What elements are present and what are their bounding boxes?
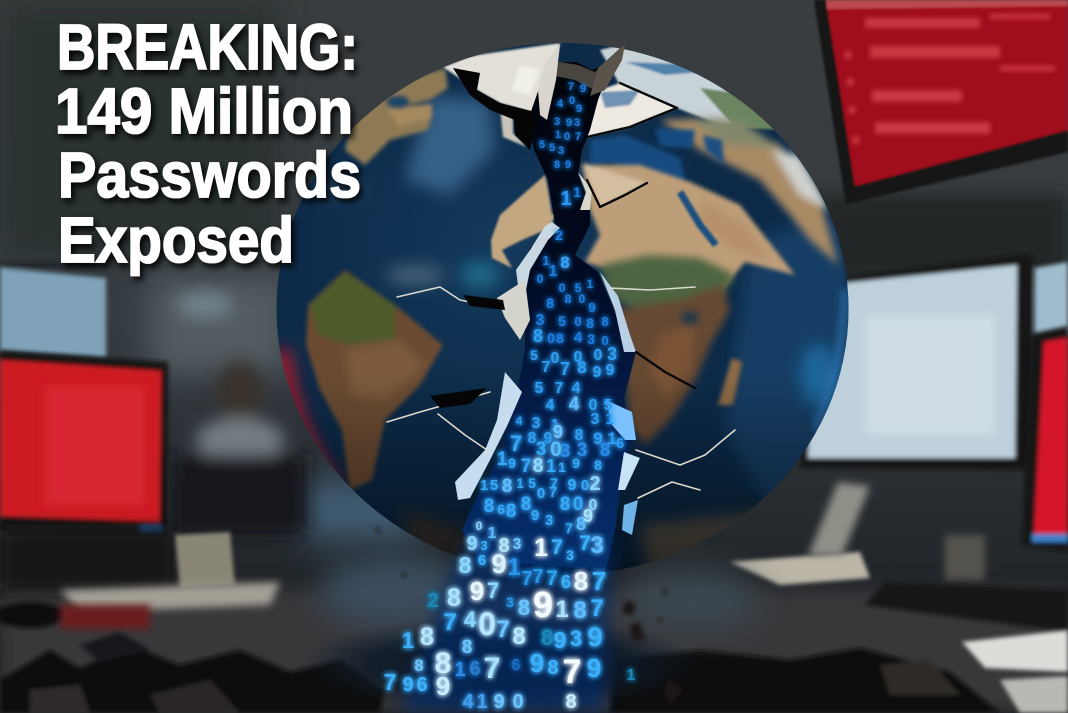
digits leaving the globe: 9 (402, 674, 414, 696)
digits inside upper crack: 1 (555, 129, 561, 141)
digits lower crack: 0 (573, 494, 583, 515)
digits inside upper crack: 3 (574, 117, 580, 129)
digits inside upper crack: 5 (539, 139, 545, 151)
digits lower crack: 0 (537, 485, 545, 502)
digits inside upper crack: 1 (587, 277, 594, 291)
digits lower crack: 9 (583, 506, 593, 526)
digits inside upper crack (533, 81, 609, 348)
digits leaving the globe (384, 532, 636, 713)
digits lower crack: 3 (536, 439, 546, 460)
digits lower crack: 7 (565, 520, 573, 536)
digits leaving the globe: 8 (541, 625, 553, 650)
digits mid crack: 0 (551, 350, 560, 367)
digits mid crack: 8 (577, 358, 587, 377)
digits leaving the globe: 0 (512, 691, 524, 713)
rubble on desk (0, 632, 1000, 713)
digits lower crack: 1 (546, 456, 556, 476)
digits inside upper crack: 0 (537, 272, 544, 286)
digits inside upper crack: 0 (564, 131, 570, 143)
digits leaving the globe: 0 (478, 606, 496, 642)
digits inside upper crack: 8 (546, 295, 554, 311)
southern africa (610, 285, 730, 445)
digits leaving the globe: 8 (435, 647, 451, 680)
digits leaving the globe: 1 (476, 691, 488, 713)
digits inside upper crack: 5 (558, 313, 566, 329)
globe surface cracks (387, 83, 735, 498)
digits mid crack: 3 (591, 411, 600, 428)
digits lower crack: 1 (558, 459, 566, 475)
digits inside upper crack: 1 (573, 184, 581, 200)
digits lower crack: 3 (577, 440, 587, 461)
central africa green (600, 255, 735, 320)
digits inside upper crack: 0 (579, 292, 586, 306)
digits leaving the globe: 7 (532, 566, 544, 588)
digits inside upper crack: 1 (542, 253, 550, 268)
dark floor under the stream (300, 615, 700, 713)
digits lower crack: 8 (594, 457, 602, 473)
digits leaving the globe: 8 (498, 535, 510, 557)
digits leaving the globe: 9 (554, 627, 566, 653)
digits leaving the globe: 1 (402, 628, 414, 653)
digits mid crack: 5 (535, 380, 544, 397)
digits mid crack: 9 (553, 422, 563, 442)
digits lower crack: 3 (545, 512, 553, 529)
digits leaving the globe: 3 (566, 547, 574, 563)
digits mid crack: 8 (528, 430, 537, 447)
digits mid crack: 4 (569, 394, 580, 415)
digits mid crack: 1 (551, 417, 560, 434)
digits inside upper crack: 8 (560, 253, 570, 272)
digits leaving the globe: 1 (534, 534, 548, 562)
digits lower crack: 8 (560, 494, 570, 515)
digits leaving the globe: 1 (627, 667, 636, 684)
digits leaving the globe: 8 (518, 595, 530, 620)
monitor: right white screen (800, 254, 1068, 470)
digits leaving the globe: 7 (546, 567, 558, 590)
digits leaving the globe: 3 (590, 532, 604, 559)
debris fragments (376, 528, 684, 704)
digits lower crack: 8 (600, 440, 610, 461)
ocean base (270, 40, 860, 580)
digits lower crack: 7 (549, 484, 557, 501)
bottom shading (295, 394, 832, 575)
digits mid crack: 0 (594, 347, 603, 364)
falling digits stream (384, 81, 636, 713)
digits leaving the globe: 6 (469, 658, 481, 680)
digits lower crack: 9 (572, 455, 580, 471)
digits inside upper crack: 9 (588, 300, 596, 315)
digits leaving the globe: 6 (478, 552, 486, 569)
digits inside upper crack: 0 (574, 314, 582, 329)
digits leaving the globe: 1 (555, 596, 569, 623)
digits leaving the globe: 7 (563, 653, 581, 691)
digits leaving the globe: 9 (587, 653, 601, 683)
west africa bulge (491, 175, 556, 268)
north polar cap (443, 43, 790, 147)
digits leaving the globe: 6 (512, 657, 521, 674)
digits mid crack: 4 (546, 397, 555, 414)
digits lower crack: 9 (568, 477, 577, 494)
red sea (680, 192, 716, 245)
digits lower crack: 1 (516, 475, 524, 491)
digits mid crack: 1 (606, 411, 615, 428)
digits leaving the globe: 9 (493, 691, 505, 713)
digits mid crack: 3 (532, 415, 541, 432)
digits lower crack: 1 (497, 449, 508, 470)
southern land (402, 506, 754, 564)
headline: Passwords (58, 139, 361, 211)
digits mid crack: 4 (516, 414, 523, 428)
digits leaving the globe: 9 (587, 622, 603, 652)
right ocean (725, 210, 850, 510)
digits lower crack: 7 (550, 475, 558, 491)
digits leaving the globe: 1 (507, 554, 521, 581)
digits inside upper crack: 0 (569, 95, 575, 107)
digits leaving the globe: 6 (416, 674, 428, 696)
digits mid crack (516, 344, 624, 452)
digits leaving the globe: 7 (496, 616, 510, 643)
digits lower crack: 1 (488, 525, 497, 542)
digits leaving the globe: 9 (533, 584, 553, 625)
digits leaving the globe: 4 (462, 691, 474, 713)
digits inside upper crack: 1 (549, 263, 558, 280)
digits mid crack: 5 (530, 347, 538, 363)
digits lower crack: 8 (484, 496, 494, 517)
north africa and arabia (582, 163, 795, 290)
monitor: left red screen (0, 350, 168, 536)
torn crust flaps (455, 172, 640, 535)
digits leaving the globe: 8 (420, 623, 434, 651)
digits mid crack: 9 (593, 364, 602, 381)
headline: 149 Million (55, 75, 353, 147)
clouds over pacific (314, 95, 500, 289)
digits mid crack: 7 (542, 359, 551, 376)
digits inside upper crack: 1 (560, 188, 572, 210)
north america (345, 68, 448, 165)
south america (306, 270, 443, 490)
digits mid crack: 7 (560, 359, 570, 379)
digits leaving the globe: 9 (466, 533, 478, 555)
digits lower crack: 0 (581, 477, 589, 494)
digits lower crack: 7 (510, 431, 522, 456)
digits leaving the globe: 3 (506, 594, 514, 610)
digits leaving the globe: 3 (513, 536, 522, 553)
digits lower crack: 9 (531, 507, 539, 524)
digits leaving the globe: 7 (521, 568, 533, 590)
red rim light (282, 350, 335, 490)
digits leaving the globe: 8 (574, 566, 588, 596)
digits leaving the globe: 7 (384, 669, 396, 695)
headline: Exposed (58, 204, 294, 276)
digits leaving the globe: 7 (484, 652, 500, 685)
digits inside upper crack: 5 (549, 142, 555, 154)
data stream below the globe (400, 540, 612, 713)
digits lower crack: 8 (576, 514, 586, 534)
blurred person in background (172, 362, 307, 535)
digits leaving the globe: 8 (459, 552, 472, 578)
digits inside upper crack: 8 (533, 326, 543, 346)
digits leaving the globe: 7 (487, 578, 499, 603)
digits lower crack: 0 (476, 519, 483, 533)
digits inside upper crack: 3 (558, 145, 564, 157)
digits leaving the globe: 7 (590, 595, 604, 622)
digits leaving the globe: 4 (464, 607, 477, 632)
digits inside upper crack: 8 (565, 292, 572, 306)
dust cloud below globe (320, 555, 760, 632)
digits inside upper crack: 9 (576, 103, 582, 115)
digits leaving the globe: 9 (436, 671, 450, 701)
digits leaving the globe: 7 (579, 532, 591, 555)
digits mid crack: 9 (606, 362, 615, 379)
digits inside upper crack: 7 (575, 131, 581, 143)
digits lower crack: 8 (506, 501, 516, 522)
digits inside upper crack: 3 (536, 312, 545, 329)
digits lower crack (476, 431, 610, 542)
digits leaving the globe: 3 (570, 626, 582, 651)
digits mid crack: 4 (572, 380, 581, 397)
digits lower crack: 2 (589, 473, 601, 495)
digits inside upper crack: 3 (554, 116, 560, 128)
blue rim light (815, 290, 845, 430)
digits leaving the globe: 8 (565, 691, 577, 713)
digits leaving the globe: 7 (592, 566, 606, 596)
digits mid crack: 7 (555, 380, 564, 397)
digits leaving the globe: 3 (480, 538, 488, 553)
digits mid crack: 0 (589, 397, 598, 414)
digits inside upper crack: 7 (568, 81, 574, 93)
crack through the globe (453, 44, 636, 570)
desk with papers and keyboards (0, 482, 1068, 713)
digits mid crack: 8 (575, 427, 584, 444)
headline: BREAKING: (57, 11, 358, 83)
madagascar (718, 358, 742, 405)
digits inside upper crack: 5 (575, 281, 582, 295)
digits leaving the globe: 9 (491, 549, 507, 579)
digits inside upper crack: 2 (555, 227, 563, 243)
digits inside upper crack: 0 (559, 281, 566, 295)
digits mid crack: 9 (544, 430, 553, 447)
mediterranean (590, 128, 724, 182)
digits mid crack: 1 (607, 429, 617, 448)
digits lower crack: 9 (508, 455, 516, 471)
digits lower crack: 0 (589, 497, 598, 514)
digits lower crack: 0 (550, 438, 562, 461)
digits leaving the globe: 9 (470, 576, 484, 606)
digits inside upper crack: 9 (580, 83, 586, 95)
digits mid crack: 0 (574, 349, 583, 366)
digits leaving the globe: 8 (512, 623, 526, 650)
earth globe (270, 40, 860, 585)
digits leaving the globe: 8 (573, 597, 587, 624)
digits lower crack: 7 (521, 456, 531, 477)
digits leaving the globe: 8 (547, 657, 559, 679)
digits lower crack: 6 (497, 501, 505, 517)
digits lower crack: 8 (521, 494, 531, 515)
digits mid crack: 5 (604, 397, 613, 414)
digits inside upper crack: 9 (565, 159, 571, 171)
digits inside upper crack: 3 (587, 331, 595, 347)
digits mid crack: 9 (593, 429, 603, 448)
digits mid crack: 6 (616, 435, 624, 452)
digits inside upper crack: 0 (547, 330, 555, 346)
asia (660, 118, 838, 265)
digits inside upper crack: 8 (556, 330, 564, 346)
digits inside upper crack: 8 (601, 314, 609, 329)
digits leaving the globe: 1 (454, 659, 466, 681)
digits lower crack: 8 (502, 476, 512, 497)
digits leaving the globe: 8 (447, 584, 461, 612)
digits mid crack: 3 (607, 344, 617, 364)
digits inside upper crack: 0 (601, 333, 609, 348)
digits lower crack: 8 (532, 455, 544, 477)
digits lower crack: 3 (560, 441, 570, 462)
digits lower crack: 5 (528, 475, 536, 491)
digits inside upper crack: 8 (586, 315, 594, 331)
digits leaving the globe: 8 (462, 637, 472, 658)
digits inside upper crack: 4 (574, 329, 583, 346)
digits lower crack: 5 (490, 477, 498, 494)
digits leaving the globe: 6 (561, 572, 571, 592)
digits lower crack: 1 (480, 477, 488, 494)
digits leaving the globe: 7 (551, 536, 563, 559)
monitor: far right red screen (1022, 326, 1068, 552)
headline (55, 11, 361, 276)
monitor: top right red screen (814, 0, 1068, 204)
digits inside upper crack: 4 (557, 98, 564, 110)
digits inside upper crack: 9 (566, 117, 572, 129)
digits leaving the globe: 7 (443, 609, 457, 636)
digits leaving the globe: 9 (530, 648, 544, 678)
digits leaving the globe: 2 (427, 590, 439, 612)
monitor: left blue screen (0, 262, 106, 358)
digits inside upper crack: 8 (554, 159, 560, 171)
digits leaving the globe: 8 (414, 656, 424, 675)
